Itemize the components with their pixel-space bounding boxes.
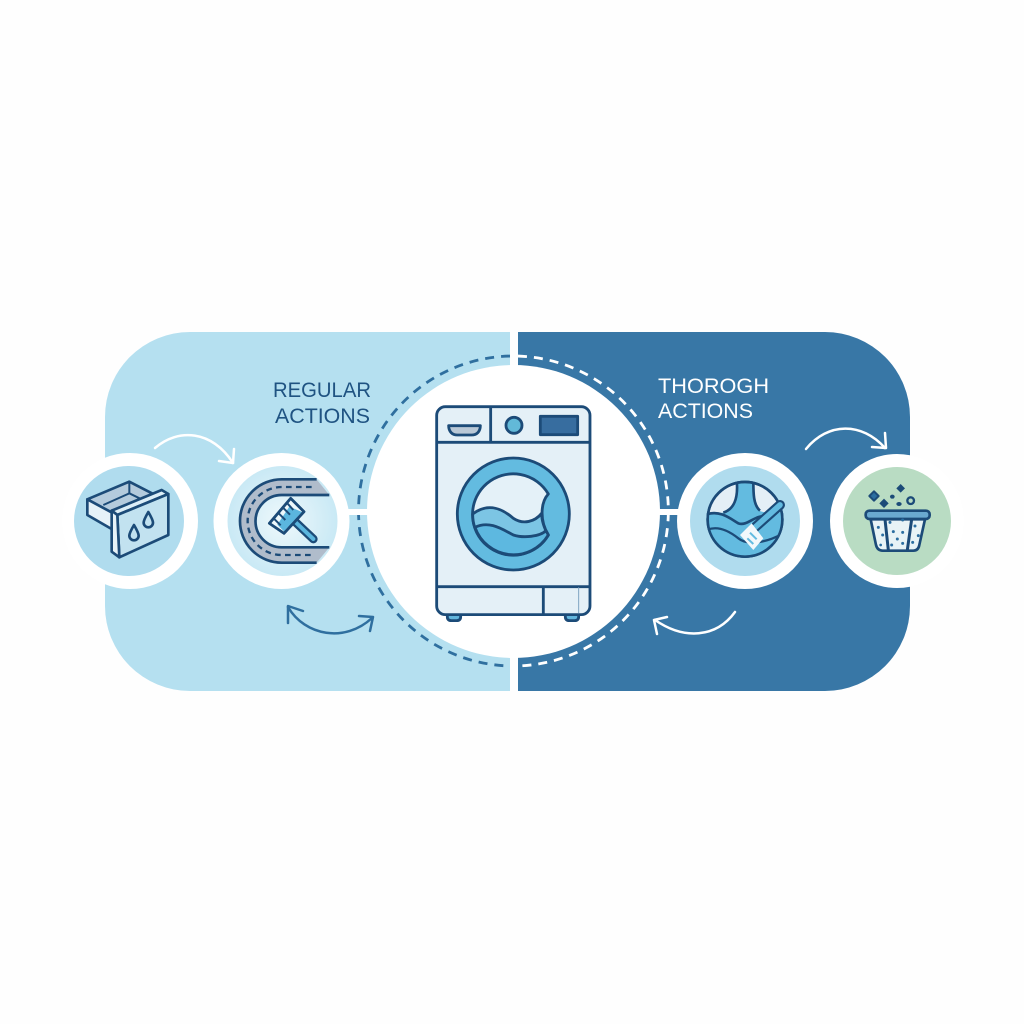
heading: thorough actions: THOROGH [658, 375, 769, 398]
icon: drum brush [677, 453, 813, 589]
heading: thorough actions: ACTIONS [658, 400, 753, 423]
central white circle [367, 365, 660, 658]
connectors to the washer [345, 509, 684, 515]
machine body [437, 407, 590, 615]
lower panel [437, 587, 590, 614]
icon: detergent drawer [62, 453, 198, 589]
heading: regular actions [273, 379, 371, 428]
arrow: drawer to gasket [155, 435, 234, 463]
door [457, 458, 569, 570]
icon: clean basket [830, 454, 964, 588]
arrow: thorough to basket [806, 429, 886, 449]
icon: washing machine [437, 407, 590, 621]
panel: thorough actions [518, 332, 910, 691]
heading: thorough actions [658, 375, 769, 423]
dashed ring: right [518, 356, 668, 666]
dashed ring: left [359, 356, 510, 666]
arrow: double-headed loop, left [288, 606, 373, 633]
panel: regular actions [105, 332, 510, 691]
icon: gasket wipe [214, 453, 350, 589]
machine feet [447, 614, 579, 621]
heading: regular actions: REGULAR [273, 379, 371, 402]
control panel [437, 407, 590, 442]
arrow: return loop, right [654, 612, 735, 634]
heading: regular actions: ACTIONS [275, 405, 370, 428]
